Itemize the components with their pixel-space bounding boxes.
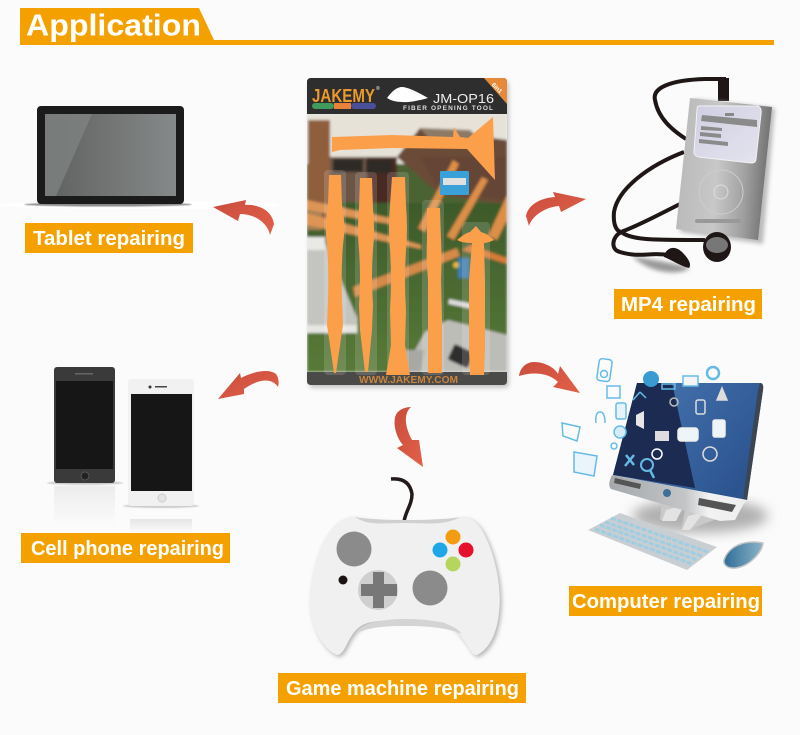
blister pack product: [307, 78, 509, 388]
arrow to MP4: [526, 192, 586, 226]
label: tablet repairing: Tablet repairing: [33, 228, 185, 250]
green button: [446, 556, 460, 572]
pack header bar: FIBER OPENING TOOL: [403, 105, 493, 112]
label: cell phone repairing: Cell phone repairing: [31, 538, 224, 560]
horizontal opening tool with fan head: [332, 117, 495, 180]
title banner: Application: [26, 8, 201, 42]
pack header bar: JAKEMY: [312, 86, 375, 106]
tool 1: [326, 175, 344, 373]
cell phones: [47, 367, 199, 533]
arrow to tablet: [213, 200, 274, 235]
screen: [613, 383, 763, 500]
pack header bar: JM-OP16: [433, 91, 494, 106]
backing photo: [307, 114, 507, 372]
tool 4: [427, 208, 442, 373]
d-pad: [358, 570, 398, 610]
MP4 player: [613, 78, 775, 272]
stand: [660, 500, 722, 530]
label: computer repairing: Computer repairing: [572, 591, 760, 613]
earbud: [703, 232, 731, 262]
tool 5: [457, 226, 494, 375]
game controller: [310, 479, 502, 657]
label: MP4 repairing: MP4 repairing: [621, 294, 756, 316]
label: MP4 repairing: [614, 289, 762, 319]
blue button: [432, 542, 448, 558]
tablet device: [0, 106, 280, 209]
title banner: [20, 8, 774, 45]
app icons: [562, 358, 727, 478]
black phone: [54, 367, 115, 483]
label: game machine repairing: Game machine repairing: [286, 678, 519, 700]
white phone: [128, 379, 194, 506]
right stick: [412, 570, 448, 606]
mouse: [724, 542, 763, 568]
pack header bar: 6in1: [490, 82, 503, 96]
arrow to game controller: [395, 407, 423, 467]
label: cell phone repairing: [21, 533, 230, 563]
arrow to cell phones: [218, 371, 279, 399]
pack header bar: ®: [376, 85, 380, 92]
tool 3: [386, 177, 410, 375]
silver bezel: [609, 475, 747, 521]
clear blister halos: [324, 170, 490, 375]
keyboard: [588, 513, 717, 570]
pack footer bar: WWW.JAKEMY.COM: [359, 375, 458, 386]
tool 2: [358, 178, 374, 372]
phone reflections: [47, 481, 199, 533]
label: game machine repairing: [278, 673, 526, 703]
left stick: [336, 532, 372, 566]
label: tablet repairing: [25, 223, 193, 253]
earphone cable: [613, 79, 726, 255]
pack header bar: [307, 78, 507, 114]
desktop computer: [562, 358, 768, 570]
black dot: [338, 576, 348, 584]
arrow to computer: [519, 362, 580, 393]
pack footer bar: [307, 372, 507, 386]
orange button: [446, 530, 460, 544]
red button: [458, 542, 474, 558]
